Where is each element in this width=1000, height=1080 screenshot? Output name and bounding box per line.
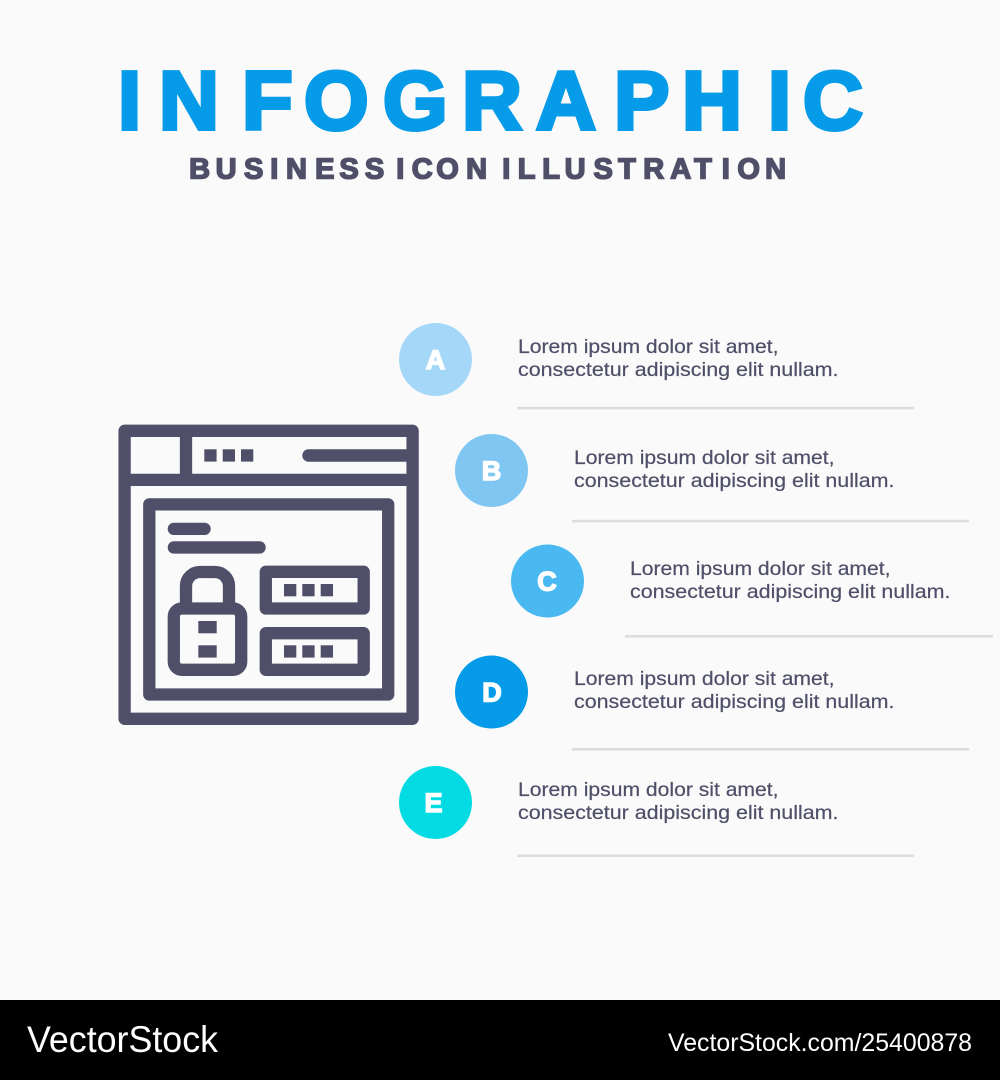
footer logo text: VectorStock [27, 1019, 218, 1060]
badge D [455, 656, 528, 728]
text B [574, 447, 894, 492]
item D [455, 656, 969, 751]
item C [511, 544, 993, 638]
text D: consectetur adipiscing elit nullam. [574, 691, 894, 713]
text E: Lorem ipsum dolor sit amet, [518, 779, 778, 801]
text C: Lorem ipsum dolor sit amet, [630, 558, 890, 580]
text C: consectetur adipiscing elit nullam. [630, 581, 950, 603]
text A: consectetur adipiscing elit nullam. [518, 359, 838, 381]
text B: consectetur adipiscing elit nullam. [574, 470, 894, 492]
text B: Lorem ipsum dolor sit amet, [574, 447, 834, 469]
footer bar [0, 1000, 1000, 1080]
badge C [511, 544, 584, 618]
item E [399, 766, 914, 857]
badge E: E [424, 788, 443, 818]
badge B [455, 434, 528, 507]
item A [399, 323, 914, 409]
footer image id: VectorStock.com/25400878 [668, 1029, 972, 1057]
item B [455, 434, 969, 522]
title: INFOGRAPHIC [118, 54, 863, 147]
badge B: B [482, 456, 501, 486]
badge C: C [537, 566, 557, 596]
subtitle: BUSINESS ICON ILLUSTRATION [189, 154, 786, 186]
text D: Lorem ipsum dolor sit amet, [574, 668, 834, 690]
text A [518, 336, 838, 381]
text C [630, 558, 950, 603]
text E: consectetur adipiscing elit nullam. [518, 802, 838, 824]
badge A: A [426, 345, 445, 375]
badge E [399, 766, 472, 839]
text E [518, 779, 838, 824]
icon: browser window with padlock login [125, 431, 413, 719]
text A: Lorem ipsum dolor sit amet, [518, 336, 778, 358]
text D [574, 668, 894, 713]
badge A [399, 323, 472, 396]
badge D: D [482, 678, 502, 708]
